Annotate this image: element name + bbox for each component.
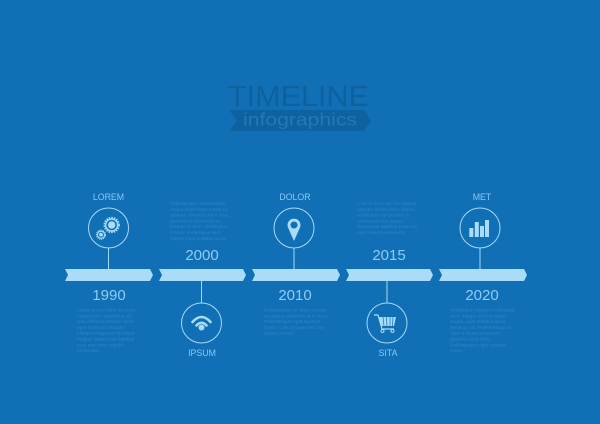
text block: gravida eu venenatis eu,	[170, 218, 222, 224]
text block: pretium in sem. Vestibulum	[170, 224, 228, 230]
text block: tristique magna et faucibus	[77, 331, 135, 337]
timeline arrows	[65, 269, 527, 281]
text block: augue, eget sodales lacus	[450, 319, 506, 325]
text block: lorem.	[450, 348, 463, 354]
text block: Cras in nunc nec leo aliquet	[357, 201, 417, 207]
text block: Sed eleifend pulvinar dolor	[77, 319, 134, 325]
text block: vestibulum vel porttitor in,	[357, 213, 411, 219]
text block: accumsan pharetra at in nunc.	[264, 313, 329, 319]
label: DOLOR: DOLOR	[279, 192, 311, 202]
milestone 2020	[450, 192, 516, 354]
text block: tempor scelerisque sem	[170, 230, 221, 236]
label: SITA: SITA	[379, 348, 398, 358]
label: IPSUM: IPSUM	[188, 348, 216, 358]
text block: tincidunt vel. Pellentesque ac	[450, 325, 513, 331]
text block: Pellentesque commentum	[170, 201, 225, 207]
text block: Lorem ipsum dolor sit amet,	[77, 308, 136, 314]
text block: feugiat. Maecenas dapibus	[77, 336, 135, 342]
icon: wifi	[182, 281, 222, 343]
text block: consectetur adipiscing elit.	[77, 313, 133, 319]
text block: sem. Integer viverra neque	[450, 313, 507, 319]
icon: map pin	[274, 208, 314, 269]
subtitle ribbon: infographics	[243, 110, 357, 130]
text block: Pellentesque eget egestas	[264, 319, 321, 325]
text block: aliquet laoreet.	[264, 331, 295, 337]
year: 2000	[185, 247, 219, 264]
text block: pharetra at in nunc.	[450, 336, 491, 342]
milestone 2015	[357, 201, 418, 358]
title: TIMELINE	[228, 81, 369, 113]
text block: venenatis.	[77, 348, 99, 354]
text block: Pellentesque eget egestas	[450, 342, 507, 348]
text block: eros non nunc sagittis	[77, 342, 124, 348]
text block: nunc viverra venenatis.	[357, 230, 406, 236]
text block: diam a lacus accumsan	[450, 331, 500, 337]
label: LOREM: LOREM	[93, 192, 124, 202]
text block: integer eget sodales lacus.	[170, 236, 227, 242]
icon: shopping cart	[367, 281, 407, 343]
text block: Maecenas dapibus eros non	[357, 224, 418, 230]
text block: lorem. Cras id quam nec leo	[264, 325, 324, 331]
text block: Pellentesque ac diam a lacus	[264, 308, 327, 314]
year: 2010	[278, 287, 312, 304]
icon: bar chart	[460, 208, 500, 269]
label: MET: MET	[473, 192, 492, 202]
year: 2015	[372, 247, 406, 264]
text block: consequat non augue.	[357, 218, 404, 224]
year: 2020	[465, 287, 499, 304]
icon: gears	[88, 208, 128, 269]
year: 1990	[92, 287, 126, 304]
text block: neque vitae tortor maximus	[170, 207, 228, 213]
milestone 2010	[264, 192, 329, 337]
text block: Vestibulum tempor scelerisque	[450, 308, 516, 314]
text block: laoreet. Donec lacus libero,	[357, 207, 415, 213]
text block: tempus. Vivamus arcu urna,	[170, 213, 230, 219]
subtitle ribbon	[229, 110, 371, 131]
text block: eget molestie. Aliquam	[77, 325, 125, 331]
milestone 1990	[77, 192, 136, 354]
milestone 2000	[170, 201, 230, 358]
